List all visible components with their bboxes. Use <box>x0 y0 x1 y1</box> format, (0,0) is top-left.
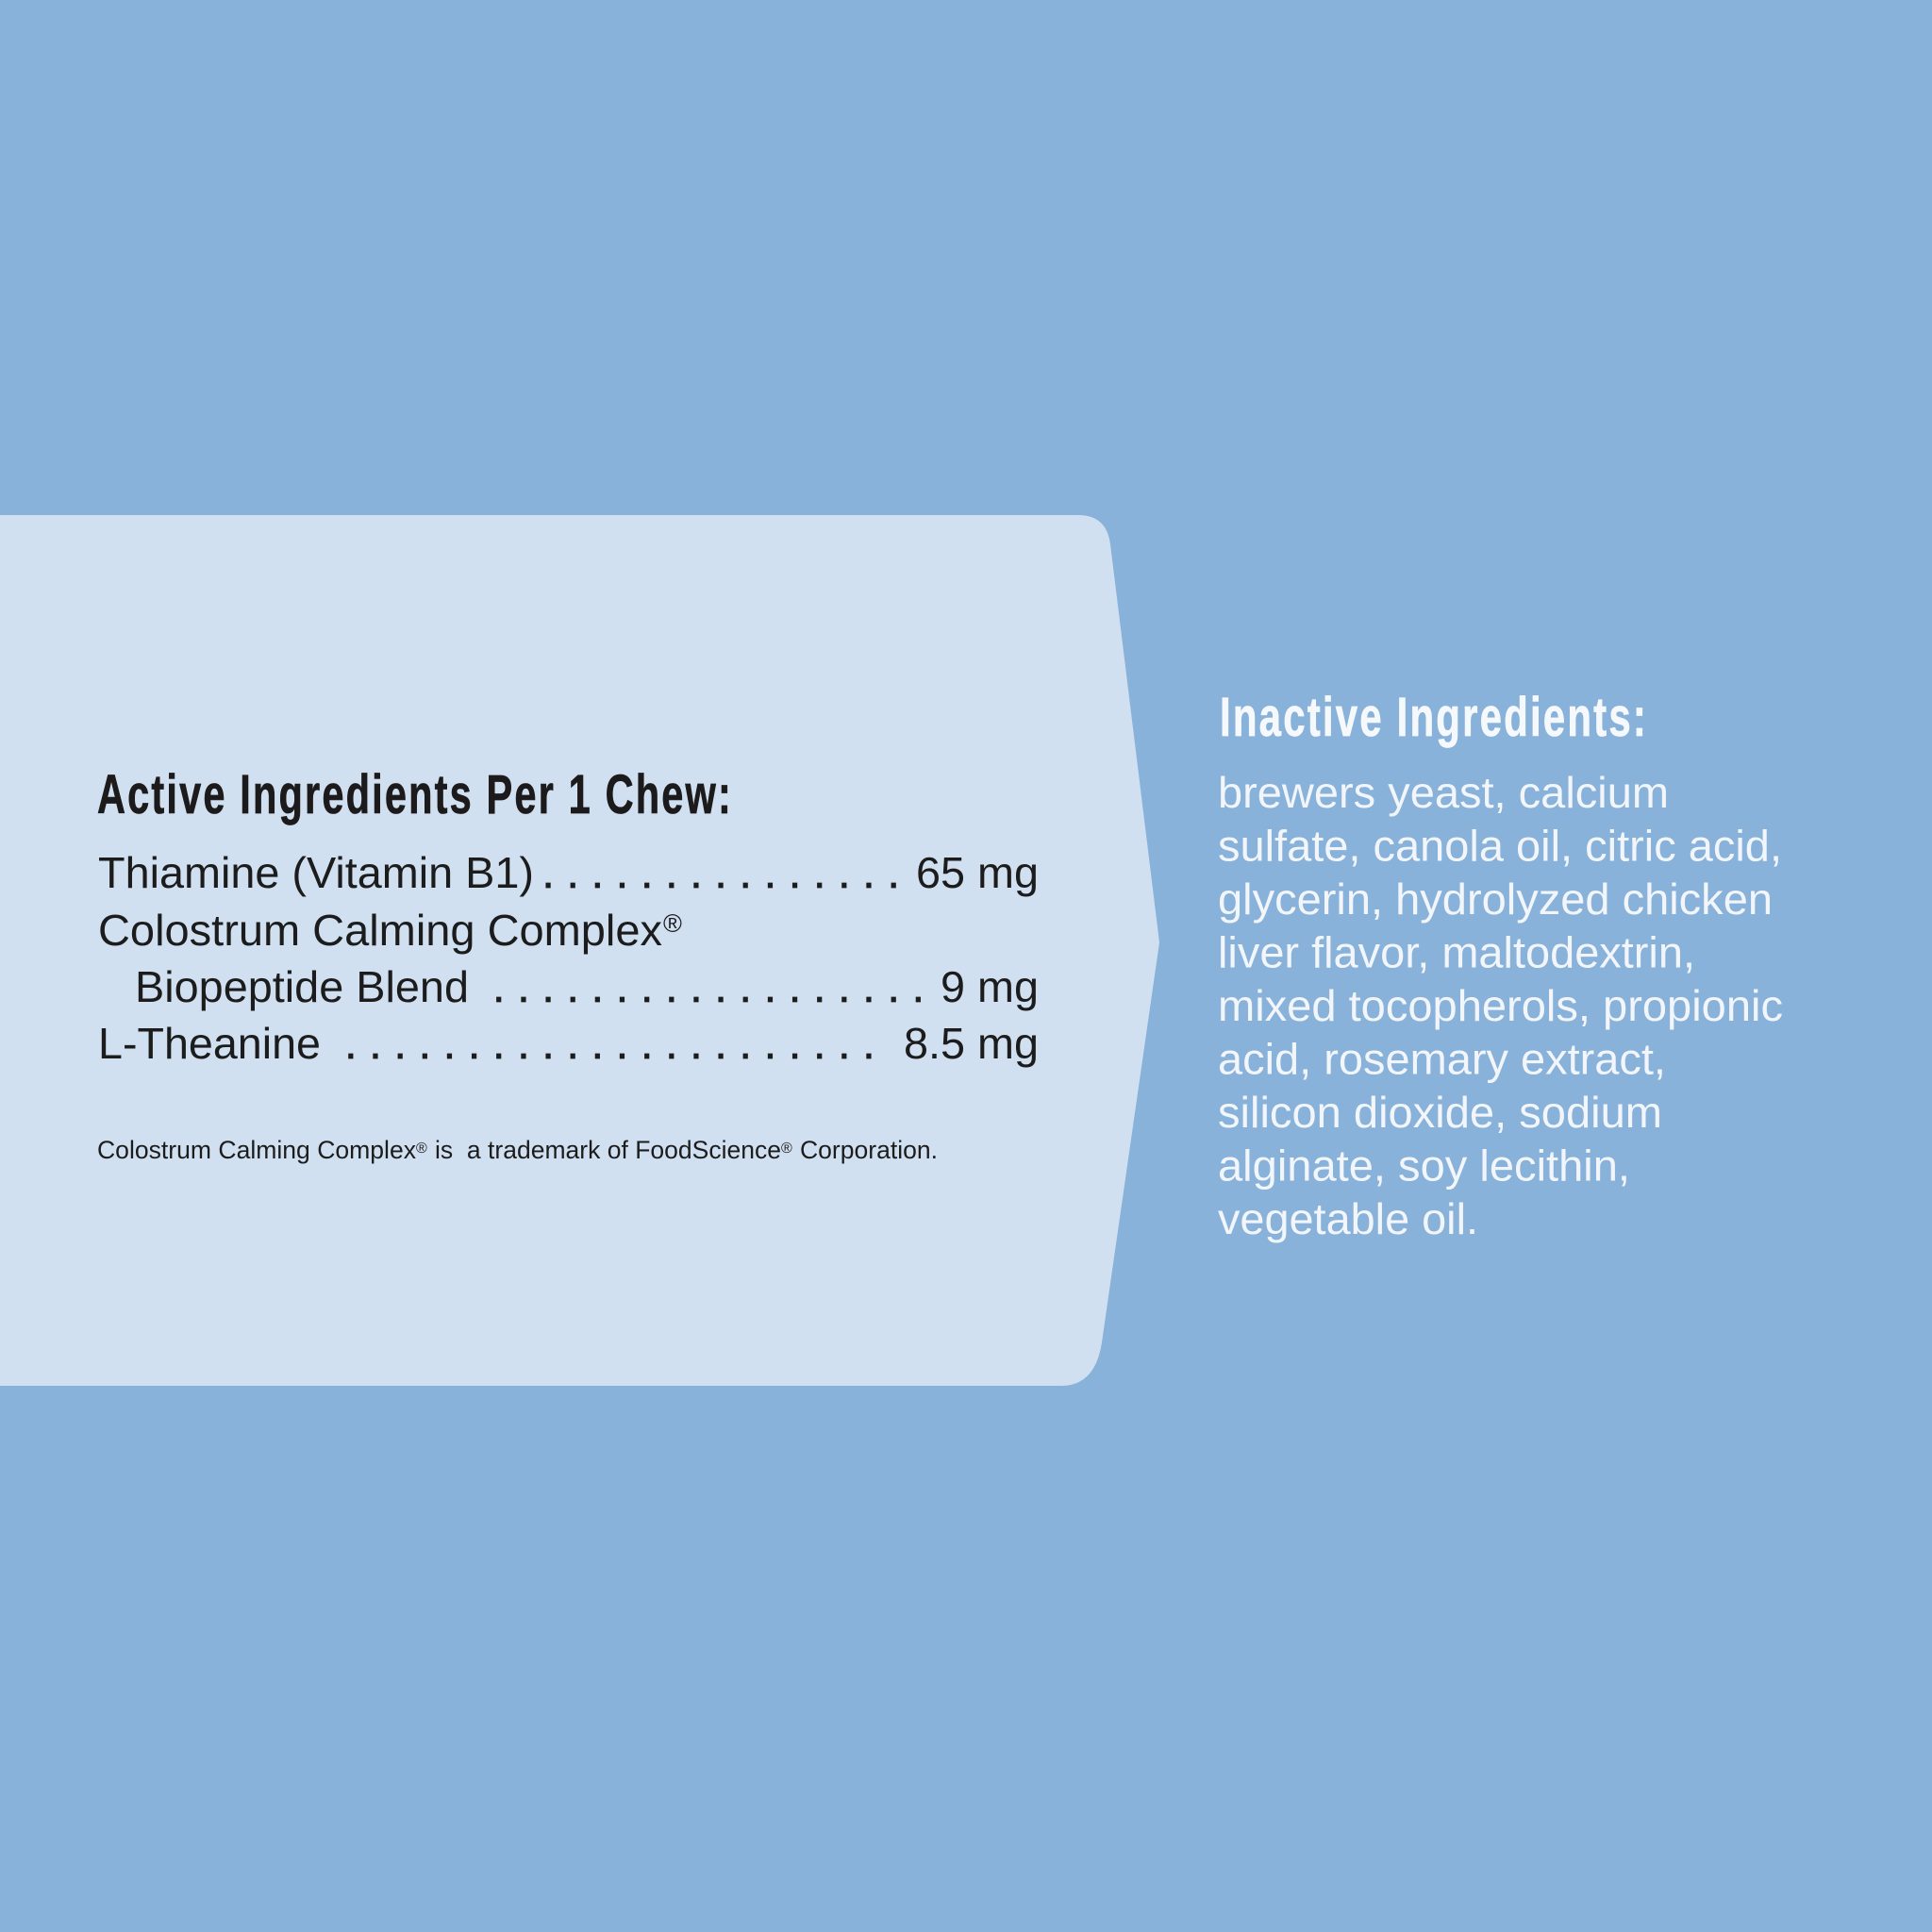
ingredient row: colostrum calming complex: ® <box>663 909 682 938</box>
ingredient row: l-theanine: 8.5 mg <box>904 1019 1039 1068</box>
footnote: trademark <box>97 1136 938 1164</box>
text block: inactive ingredients list: alginate, soy lecithin, <box>1218 1141 1630 1191</box>
footnote: trademark: is a trademark of FoodScience <box>435 1136 781 1164</box>
ingredient row: thiamine <box>98 848 1039 897</box>
footnote: trademark: Colostrum Calming Complex <box>97 1136 416 1164</box>
footnote: trademark: ® <box>416 1141 427 1157</box>
ingredient row: thiamine: ............... <box>542 848 900 897</box>
ingredient row: l-theanine <box>98 1019 1039 1068</box>
ingredient row: l-theanine: ...................... <box>344 1019 874 1068</box>
ingredient row: thiamine: Thiamine (Vitamin B1) <box>98 848 534 897</box>
text block: inactive ingredients list: sulfate, canola oil, citric acid, <box>1218 821 1782 870</box>
ingredient row: biopeptide blend <box>135 962 1039 1011</box>
ingredient row: biopeptide blend: .................. <box>492 962 924 1011</box>
heading: active ingredients: Active Ingredients Per 1 Chew: <box>97 764 733 825</box>
footnote: trademark: Corporation. <box>800 1136 938 1164</box>
ingredient row: l-theanine: L-Theanine <box>98 1019 321 1068</box>
heading: inactive ingredients: Inactive Ingredients: <box>1220 687 1648 748</box>
ingredient row: colostrum calming complex: Colostrum Calming Complex <box>98 906 662 955</box>
text block: inactive ingredients list: brewers yeast, calcium <box>1218 768 1669 817</box>
ingredient row: biopeptide blend: 9 mg <box>941 962 1039 1011</box>
ingredient row: thiamine: 65 mg <box>916 848 1039 897</box>
footnote: trademark: ® <box>781 1141 792 1157</box>
panel: inactive ingredients <box>1218 687 1783 1243</box>
ingredient row: biopeptide blend: Biopeptide Blend <box>135 962 469 1011</box>
text block: inactive ingredients list: acid, rosemary extract, <box>1218 1034 1666 1083</box>
text block: inactive ingredients list: glycerin, hydrolyzed chicken <box>1218 874 1773 924</box>
text block: inactive ingredients list: silicon dioxide, sodium <box>1218 1088 1662 1137</box>
text block: inactive ingredients list: mixed tocopherols, propionic <box>1218 981 1783 1030</box>
text block: inactive ingredients list <box>1218 768 1783 1243</box>
text block: inactive ingredients list: vegetable oil. <box>1218 1194 1478 1243</box>
panel: active ingredients arrow <box>0 515 1159 1386</box>
text block: inactive ingredients list: liver flavor, maltodextrin, <box>1218 928 1695 977</box>
